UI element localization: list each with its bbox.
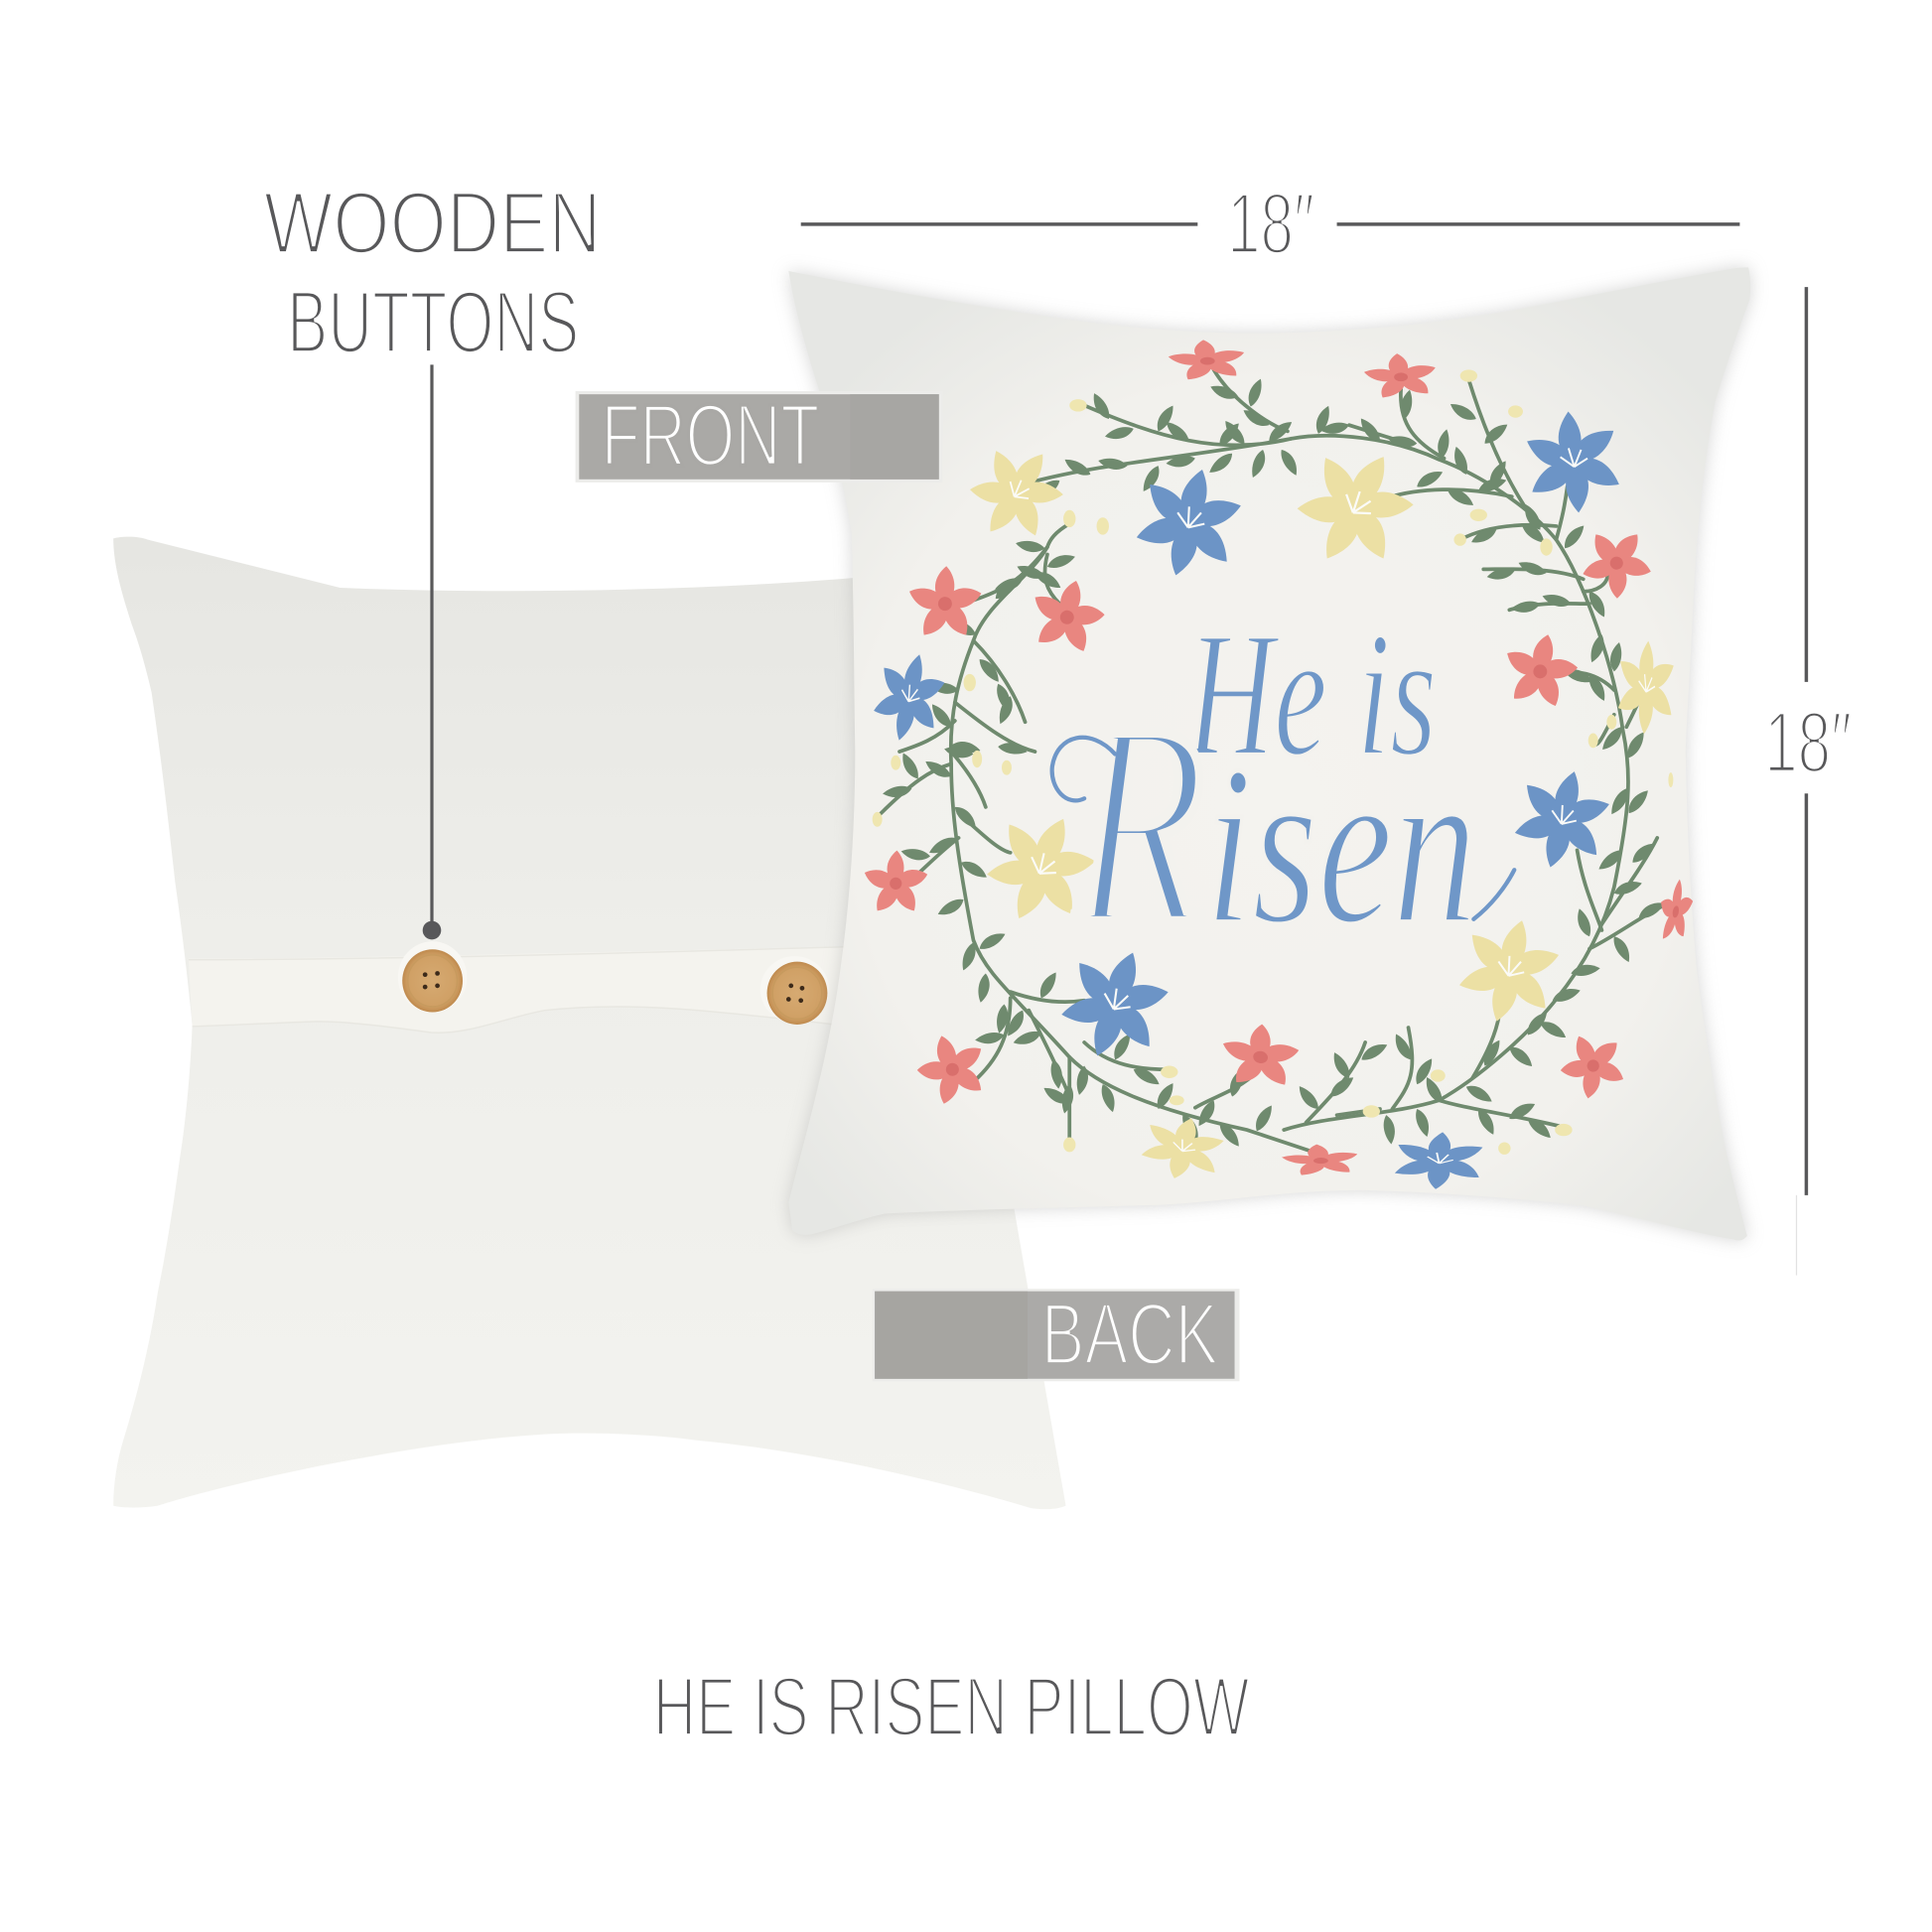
- callout heading BUTTONS: BUTTONS: [287, 272, 579, 371]
- yellow lilies: [954, 430, 1676, 1186]
- front pillow: [788, 267, 1750, 1241]
- BACK label: [873, 1285, 1240, 1383]
- wreath stems: [878, 369, 1663, 1152]
- wreath leaves: [882, 376, 1667, 1150]
- callout heading WOODEN: WOODEN: [264, 173, 602, 272]
- leader line: [431, 364, 433, 926]
- title: HE IS RISEN PILLOW: [653, 1660, 1250, 1753]
- FRONT label: FRONT: [602, 386, 819, 484]
- wooden button left: [398, 941, 467, 1013]
- height dimension: 18 inches: 18″: [1764, 695, 1852, 791]
- embroidered script He is: He is: [1186, 596, 1437, 793]
- front pillow body: [788, 267, 1750, 1241]
- leader dot: [423, 921, 441, 939]
- embroidered wreath: [857, 340, 1698, 1189]
- flap seam: [189, 946, 863, 1033]
- BACK label: BACK: [1041, 1285, 1218, 1383]
- wreath buds: [873, 369, 1673, 1155]
- wooden button right: [760, 956, 829, 1025]
- embroidered script Risen: Risen: [1071, 664, 1477, 985]
- back pillow: [113, 537, 1066, 1509]
- front pillow shadow: [788, 267, 1750, 1241]
- blue lilies: [867, 403, 1631, 1189]
- callout: wooden buttons: [264, 173, 602, 939]
- back pillow body: [113, 537, 1066, 1509]
- back pillow button flap: [189, 946, 863, 1033]
- Risen flourishes: [1052, 738, 1514, 919]
- width dimension: 18 inches: 18″: [1227, 176, 1314, 272]
- pink flowers: [857, 340, 1698, 1177]
